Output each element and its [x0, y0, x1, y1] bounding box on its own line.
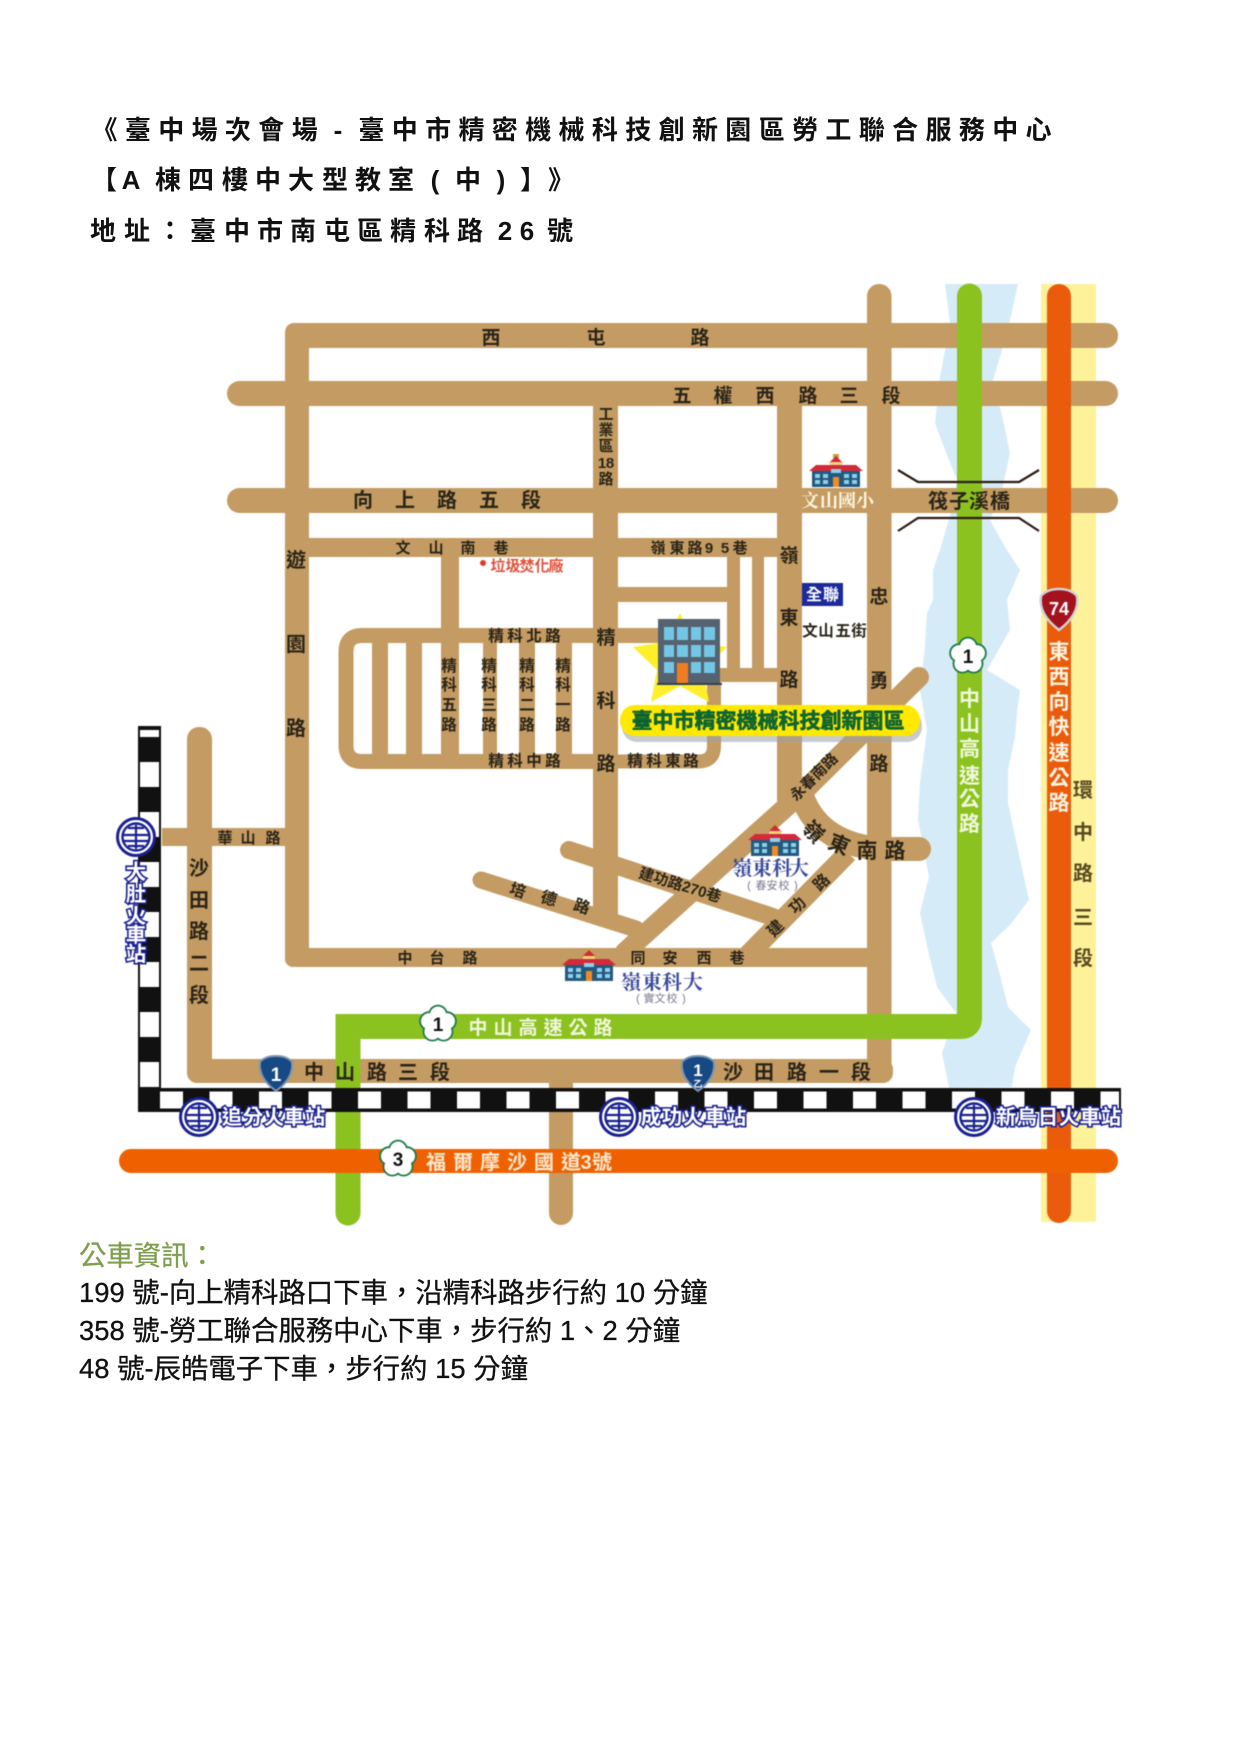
landmarks	[562, 454, 876, 1005]
landmarks: (實文校)	[636, 991, 686, 1005]
road labels: 文山南巷	[395, 539, 509, 557]
landmarks: 全聯	[806, 586, 839, 604]
road labels: 南路	[856, 840, 906, 863]
road labels: 同安西巷	[630, 949, 745, 967]
train stations: 新烏日火車站	[996, 1105, 1121, 1129]
road labels: 嶺東路	[779, 545, 799, 691]
heading: venue title and address: 地址：臺中市南屯區精科路26號	[90, 216, 573, 246]
train stations: 大肚火車站	[126, 861, 146, 966]
bus information: 199 號-向上精科路口下車，沿精科路步行約 10 分鐘	[79, 1277, 708, 1308]
road labels: 嶺東路95巷	[650, 539, 748, 557]
heading: venue title and address: 《臺中場次會場-臺中市精密機械科技創新園區勞工聯合服務中心	[91, 115, 1052, 145]
bus information: 358 號-勞工聯合服務中心下車，步行約 1、2 分鐘	[79, 1315, 680, 1346]
road labels: 華山路	[217, 829, 281, 847]
highway labels: 中山高速公路	[468, 1016, 613, 1039]
highway labels	[426, 641, 1070, 1174]
venue star and building	[633, 613, 727, 702]
highway shields	[260, 589, 1077, 1176]
road labels: 工業區18路	[598, 406, 614, 488]
road labels: 路	[571, 895, 592, 918]
road labels: 建	[764, 917, 788, 941]
highway shields: 3	[393, 1150, 403, 1171]
road labels: 沙田路一段	[723, 1060, 871, 1084]
road labels: 中台路	[397, 949, 478, 967]
road labels: 向上路五段	[353, 488, 541, 512]
train stations: 追分火車站	[222, 1106, 325, 1129]
road labels: 沙田路二段	[189, 858, 209, 1007]
road labels: 垃圾焚化廠	[490, 557, 564, 575]
road labels: 精科五路	[441, 656, 457, 734]
road labels: 遊園路	[286, 548, 306, 740]
venue banner: 臺中市精密機械科技創新園區	[632, 709, 904, 733]
road labels: 精科三路	[481, 656, 497, 734]
road labels: 忠勇路	[869, 586, 889, 775]
highway shields: 1	[963, 647, 974, 668]
bus information	[79, 1240, 708, 1384]
venue banner	[620, 705, 922, 742]
road labels: 五權西路三段	[672, 384, 901, 407]
road labels: 中山路三段	[304, 1060, 450, 1084]
highway labels: 中山高速公路	[959, 688, 980, 836]
road labels: 精科一路	[555, 656, 571, 734]
road labels	[189, 327, 1093, 1084]
landmarks: (春安校)	[747, 878, 798, 892]
road labels: 永春南路	[786, 749, 842, 805]
road labels: 筏子溪橋	[928, 489, 1010, 513]
bus information: 公車資訊：	[79, 1240, 216, 1271]
road labels: 精科北路	[488, 626, 561, 645]
highway shields: 1	[433, 1015, 444, 1036]
bridge marks	[898, 470, 1039, 531]
road labels: 培	[507, 879, 528, 902]
river	[918, 284, 1031, 1088]
highway shields: 74	[1049, 599, 1069, 619]
railway	[138, 726, 1121, 1112]
landmarks: 嶺東科大	[621, 970, 703, 994]
heading: venue title and address	[90, 115, 1052, 246]
train stations: 成功火車站	[641, 1105, 746, 1129]
road labels: 德	[538, 888, 559, 910]
road labels: 精科路	[596, 627, 616, 775]
landmarks: 文山國小	[801, 491, 876, 511]
road labels: 路	[809, 870, 834, 895]
highway labels: 東西向快速公路	[1048, 641, 1070, 815]
local roads	[162, 284, 1118, 1225]
road labels: 嶺	[797, 817, 828, 848]
road labels: 建功路270巷	[637, 864, 723, 906]
ring road yellow band	[1041, 284, 1096, 1222]
highways	[348, 296, 970, 1213]
road labels: 精科東路	[627, 751, 699, 770]
road labels: 功	[786, 894, 810, 918]
highway shields: 乙	[693, 1079, 703, 1089]
road labels: 文山五街	[802, 621, 867, 640]
train stations	[118, 818, 1121, 1136]
highway shields: 1	[693, 1061, 703, 1080]
highway shields: 1	[271, 1065, 282, 1086]
road labels: 精科中路	[488, 751, 561, 770]
road labels: 東	[825, 831, 853, 860]
national freeway 3	[119, 1149, 1118, 1173]
road labels: 西屯路	[481, 327, 710, 349]
landmarks: 嶺東科大	[732, 856, 809, 880]
highway labels: 福爾摩沙國道3號	[426, 1150, 612, 1174]
road labels: 精科二路	[519, 656, 535, 734]
bus information: 48 號-辰皓電子下車，步行約 15 分鐘	[79, 1353, 528, 1384]
map: location map	[118, 284, 1121, 1225]
road labels: 環中路三段	[1073, 780, 1093, 970]
heading: venue title and address: 【A棟四樓中大型教室(中)】》	[91, 165, 574, 195]
